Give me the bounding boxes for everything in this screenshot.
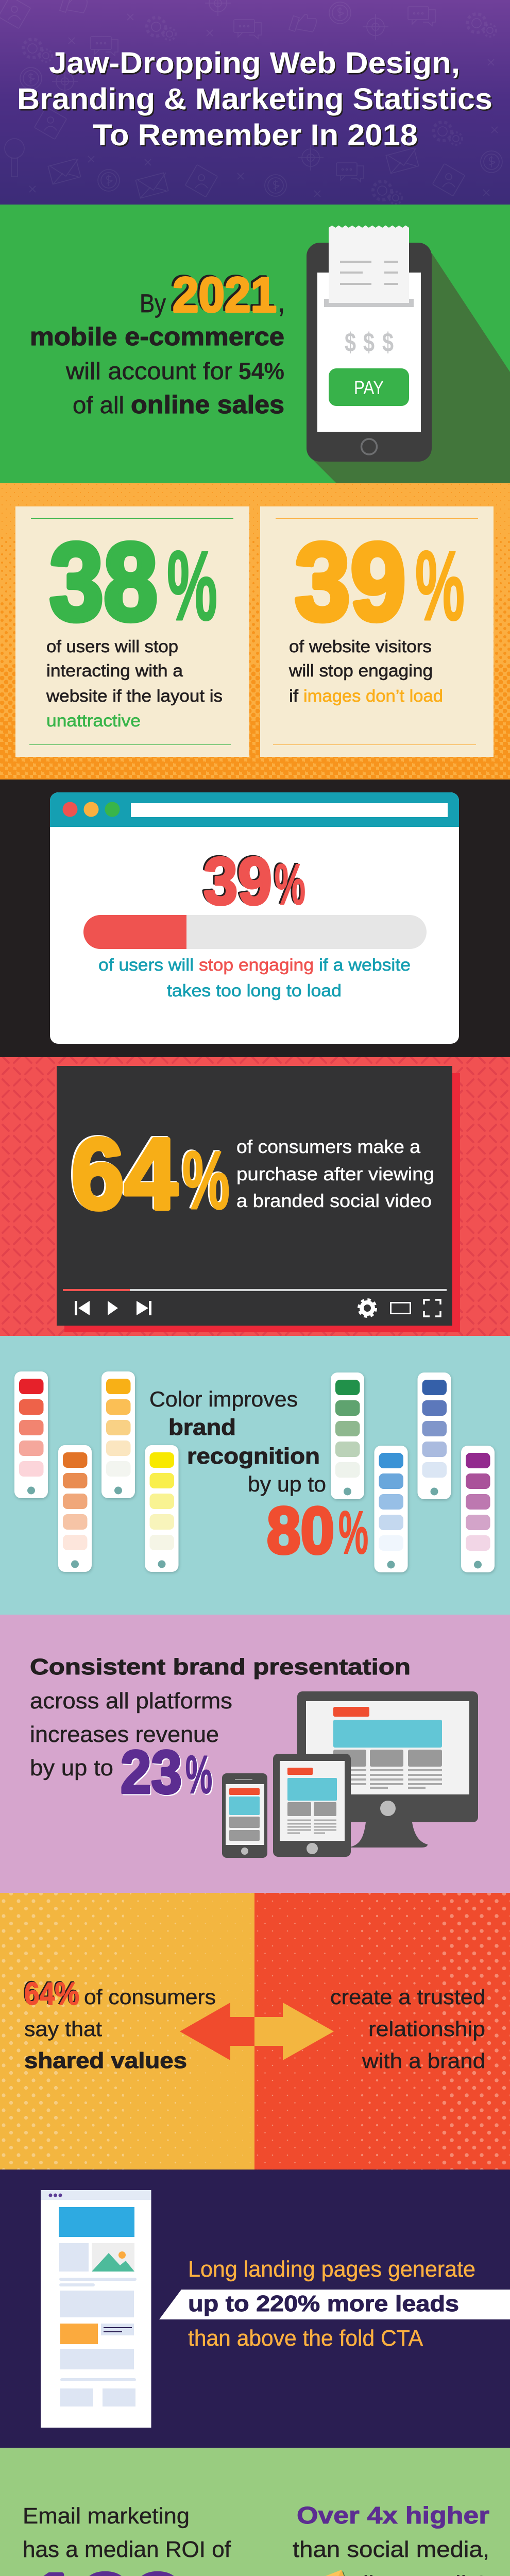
icon: phone with receipt: $	[382, 328, 394, 358]
panel: brand presentation	[0, 1615, 510, 1893]
icon: phone with receipt: $	[345, 328, 356, 358]
text: over 4x higher	[293, 2502, 489, 2576]
text: 2021 statistic: 54%	[239, 358, 284, 384]
stat: 39%: 39	[202, 842, 270, 918]
panel: mobile e-commerce	[0, 205, 510, 483]
title: To Remember In 2018	[94, 120, 419, 154]
text: email ROI	[23, 2503, 231, 2562]
text: color improves brand recognition: brand	[168, 1415, 236, 1440]
controls	[75, 1299, 440, 1317]
caption: purchase after viewing	[236, 1163, 434, 1184]
progress bar	[83, 915, 427, 949]
stat: 64%: %	[182, 1134, 230, 1226]
caption: if a website	[319, 955, 411, 974]
stat: 64%: %	[181, 1133, 228, 1225]
text: color improves brand recognition	[149, 1387, 368, 1568]
icon: phone with receipt: PAY	[354, 377, 384, 398]
card: 39% images: %	[415, 530, 465, 641]
card: 38%: of users will stop	[46, 637, 178, 656]
panel: branded video	[0, 1057, 510, 1336]
card: 39% images: 39	[295, 520, 406, 643]
caption	[236, 1136, 434, 1211]
arrow: left	[180, 2003, 254, 2060]
card: 39% images: will stop engaging	[288, 661, 433, 680]
text: color improves brand recognition: 80	[267, 1494, 334, 1568]
caption	[98, 955, 411, 1000]
text: consistent brand presentation: by up to	[30, 1755, 113, 1781]
text: consistent brand presentation: %	[186, 1746, 213, 1806]
stat: 64%: 64	[71, 1117, 178, 1230]
caption: takes too long to load	[167, 981, 342, 1000]
text: long landing pages: than above the fold CTA	[188, 2326, 423, 2351]
text: 2021 statistic: will account for	[65, 358, 232, 384]
text: 2021 statistic: mobile e-commerce	[30, 323, 284, 351]
title: To Remember In 2018	[93, 118, 418, 152]
text: long landing pages: up to 220% more leads	[188, 2291, 459, 2316]
white band	[159, 2290, 510, 2319]
text: 2021 statistic: By	[140, 289, 166, 318]
caption: of consumers make a	[236, 1136, 421, 1157]
video player	[57, 1066, 452, 1326]
text: email ROI: has a median ROI of	[23, 2537, 231, 2562]
card: 38%: website if the layout is	[46, 686, 223, 705]
card: 38%: %	[167, 530, 217, 641]
text: consistent brand presentation: increases revenue	[30, 1722, 219, 1747]
phone long shadow	[312, 253, 510, 483]
panel: color recognition	[0, 1336, 510, 1615]
title	[17, 46, 494, 154]
icon: phone	[222, 1773, 267, 1858]
card: 39% images: if	[289, 686, 299, 705]
card: 39% images: images don’t load	[303, 686, 443, 705]
icon: phone with receipt	[307, 226, 432, 462]
text: color improves brand recognition: recognition	[187, 1444, 320, 1469]
title: Branding & Marketing Statistics	[17, 82, 492, 116]
text: color improves brand recognition: by up to	[248, 1472, 326, 1496]
panel: page load	[0, 779, 510, 1057]
text: consistent brand presentation	[30, 1654, 411, 1807]
text: create a trusted relationship with a brand: relationship	[368, 2017, 485, 2041]
text: 2021 statistic: online sales	[131, 391, 284, 419]
card: 38%: 38	[49, 520, 158, 643]
card: 39% images	[260, 506, 494, 757]
title: Jaw-Dropping Web Design,	[49, 46, 460, 80]
text: over 4x higher: Over 4x higher	[297, 2502, 489, 2529]
text: consistent brand presentation: Consistent brand presentation	[30, 1654, 411, 1680]
browser window	[50, 792, 459, 1044]
stat: 64%	[70, 1116, 230, 1230]
text: consistent brand presentation: 23	[122, 1739, 183, 1807]
text: 64% of consumers say that shared values: say that	[24, 2017, 103, 2041]
text: long landing pages: Long landing pages generate	[188, 2257, 475, 2282]
caption: of users will	[98, 955, 194, 974]
title: Jaw-Dropping Web Design,	[50, 47, 462, 81]
caption: a branded social video	[236, 1190, 432, 1211]
text: consistent brand presentation: across all platforms	[30, 1688, 232, 1714]
card: 38%: unattractive	[46, 711, 141, 730]
stat: 64%: 64	[70, 1116, 176, 1229]
caption: stop engaging	[199, 955, 314, 974]
color swatch strips	[14, 1371, 495, 1572]
panel: landing pages	[0, 2170, 510, 2448]
panel: header	[0, 0, 510, 205]
text: 2021 statistic: 2021	[171, 266, 275, 321]
stat: 39%: 39	[203, 843, 272, 919]
arrow: right	[254, 2003, 334, 2060]
icon: phone with receipt: $	[363, 328, 375, 358]
icon: small envelope	[303, 2570, 353, 2576]
text: email ROI: Email marketing	[23, 2503, 190, 2529]
panel: orange halftone	[0, 483, 510, 779]
text: 64% of consumers say that shared values: of consumers	[84, 1985, 216, 2009]
text: 2021 statistic	[30, 266, 284, 419]
text: consistent brand presentation: %	[185, 1745, 212, 1805]
panel: shared values	[0, 1893, 510, 2170]
text: over 4x higher: than social media,	[293, 2537, 489, 2562]
stat: 39%: %	[275, 852, 305, 917]
text: 64% of consumers say that shared values	[23, 1975, 216, 2073]
text: 64% of consumers say that shared values: 64%	[24, 1976, 79, 2012]
panel: email marketing	[0, 2448, 510, 2576]
text: create a trusted relationship with a brand: with a brand	[362, 2049, 485, 2073]
text: create a trusted relationship with a brand: create a trusted	[330, 1985, 485, 2009]
card: 39% images: of website visitors	[289, 637, 432, 656]
text: color improves brand recognition: %	[338, 1499, 368, 1567]
stat: 39%: %	[273, 851, 304, 916]
text: long landing pages	[188, 2257, 475, 2351]
text: create a trusted relationship with a brand	[330, 1985, 485, 2073]
icon: tablet	[273, 1754, 351, 1857]
text: 2021 statistic: ,	[278, 289, 284, 318]
card: 38%	[15, 506, 249, 757]
text: 64% of consumers say that shared values: 64%	[23, 1975, 78, 2011]
title: Branding & Marketing Statistics	[19, 83, 494, 117]
card: 38%: interacting with a	[46, 661, 183, 680]
text: 2021 statistic: 2021	[173, 267, 277, 323]
text: 64% of consumers say that shared values: shared values	[24, 2048, 187, 2073]
icon: desktop monitor	[297, 1691, 478, 1848]
text: 2021 statistic: of all	[73, 392, 124, 418]
progress	[63, 1289, 447, 1291]
icon: landing page mockup	[41, 2190, 151, 2428]
text: consistent brand presentation: 23	[121, 1738, 182, 1806]
text: color improves brand recognition: Color improves	[149, 1387, 298, 1411]
